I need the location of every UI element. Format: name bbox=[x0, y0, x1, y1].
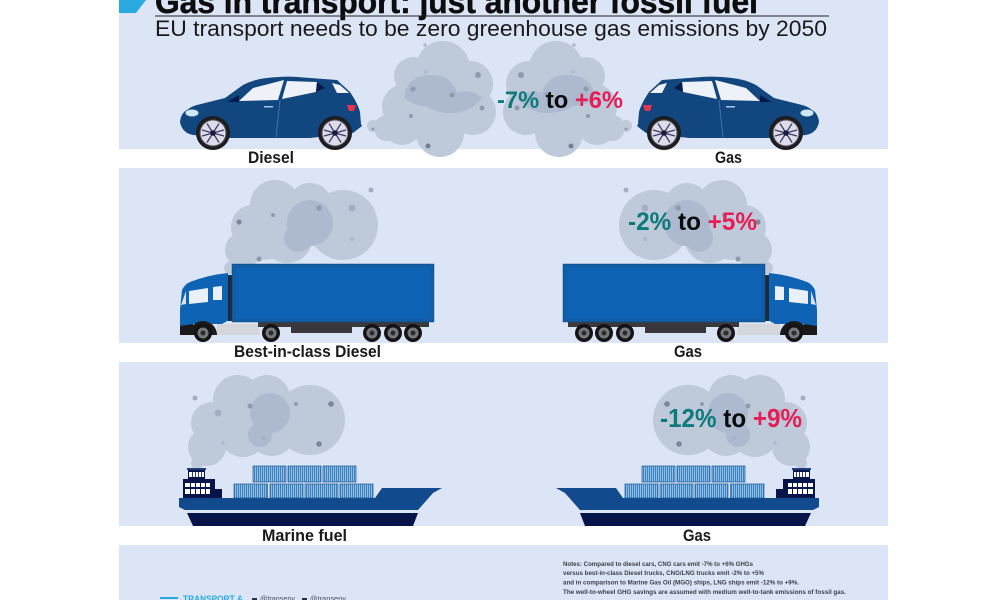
icon: gas ship bbox=[556, 466, 819, 526]
range: ships: -12% to +9% bbox=[660, 403, 802, 433]
notes: versus best-in-class Diesel trucks, CNG/LNG trucks emit -2% to +5% bbox=[563, 570, 764, 577]
cloud: diesel car emissions bbox=[367, 41, 496, 157]
icon: diesel truck bbox=[180, 264, 434, 342]
panel: trucks bbox=[119, 168, 888, 343]
notes bbox=[563, 561, 846, 596]
panel: ships bbox=[119, 362, 888, 526]
panel: cars bbox=[119, 0, 888, 149]
cloud: gas car emissions bbox=[503, 41, 632, 157]
cloud: diesel truck emissions bbox=[224, 180, 378, 274]
notes: The well-to-wheel GHG savings are assumed with medium well-to-tank emissions of fossil gas. bbox=[563, 589, 846, 596]
icon: gas car bbox=[637, 77, 819, 150]
cloud: marine fuel ship emissions bbox=[188, 375, 345, 469]
label: Marine fuel: Marine fuel bbox=[262, 526, 347, 545]
icon: gas truck bbox=[564, 264, 817, 342]
label: Gas (truck): Gas bbox=[674, 342, 702, 361]
cloud: gas truck emissions bbox=[619, 180, 773, 274]
range: trucks: -2% to +5% bbox=[628, 208, 757, 236]
social handles bbox=[252, 596, 347, 600]
label: Best-in-class Diesel: Best-in-class Diesel bbox=[234, 342, 381, 361]
range: cars: -7% to +6% bbox=[497, 87, 623, 114]
notes: and in comparison to Marine Gas Oil (MGO) ships, LNG ships emit -12% to +9%. bbox=[563, 580, 799, 586]
notes: Notes: Compared to diesel cars, CNG cars emit -7% to +6% GHGs bbox=[563, 561, 753, 568]
cloud: gas ship emissions bbox=[653, 375, 810, 469]
label: Diesel: Diesel bbox=[248, 148, 294, 167]
panel: footer bbox=[119, 545, 888, 600]
icon: diesel car bbox=[180, 77, 362, 150]
logo: Transport & Environment bbox=[160, 594, 243, 600]
subtitle: EU transport needs to be zero greenhouse gas emissions by 2050 bbox=[155, 16, 827, 41]
icon: blue logo corner bbox=[119, 0, 146, 13]
label: Gas (car): Gas bbox=[715, 148, 742, 167]
label: Gas (ship): Gas bbox=[683, 526, 711, 545]
icon: marine fuel ship bbox=[179, 466, 442, 526]
